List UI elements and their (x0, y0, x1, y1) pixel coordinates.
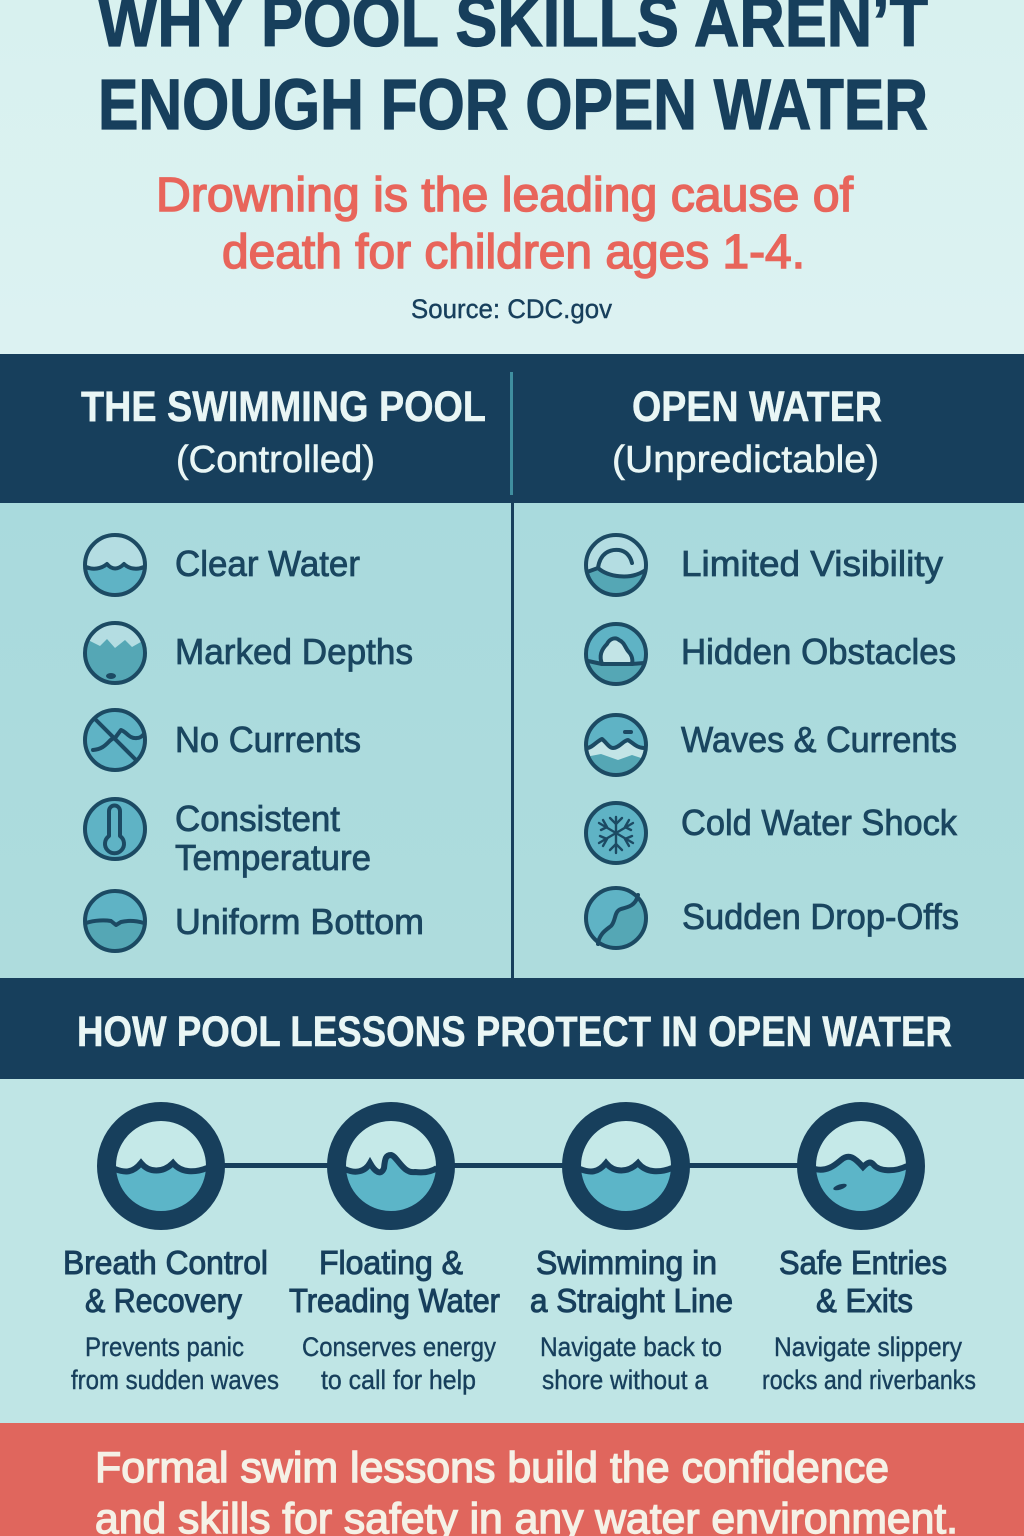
label: limited visibility: Limited Visibility (681, 543, 943, 584)
skill: breath control: Prevents panic (85, 1332, 244, 1362)
label: sudden drop-offs: Sudden Drop-Offs (682, 896, 959, 937)
skill: floating and treading water (289, 1244, 500, 1395)
label: consistent temperature (175, 798, 371, 878)
skill: swimming in a straight line: Swimming in (536, 1244, 717, 1281)
icon: uniform bottom (84, 890, 146, 952)
skill: swimming in a straight line: a Straight Line (530, 1282, 733, 1319)
icon: breath control (106, 1112, 216, 1220)
label: hidden obstacles: Hidden Obstacles (681, 631, 956, 672)
icon: straight line swimming (572, 1112, 680, 1220)
source line: Source: CDC.gov (411, 294, 612, 324)
section heading band (0, 978, 1024, 1079)
icon: no currents (85, 710, 145, 770)
subtitle statistic: death for children ages 1-4. (222, 226, 805, 279)
footer callout (0, 1423, 1024, 1536)
label: marked depths: Marked Depths (175, 631, 413, 672)
label: consistent temperature: Temperature (175, 837, 371, 878)
icon: snowflake (586, 803, 646, 863)
panel: open water (585, 534, 959, 952)
label: waves and currents: Waves & Currents (681, 719, 957, 760)
skill: safe entries and exits: rocks and riverbanks (762, 1365, 976, 1395)
icon: safe entries (806, 1112, 916, 1220)
header background (0, 0, 1024, 354)
footer callout: Formal swim lessons build the confidence (95, 1444, 889, 1492)
comparison header band: (Controlled) (176, 439, 375, 481)
label: cold water shock: Cold Water Shock (681, 802, 958, 843)
comparison header band: THE SWIMMING POOL (81, 383, 486, 431)
comparison header band: (Unpredictable) (612, 439, 879, 481)
icon: waves and currents (585, 714, 647, 776)
comparison panel background (0, 503, 1024, 978)
skills timeline (106, 1112, 916, 1220)
comparison header band (0, 354, 1024, 503)
skill: swimming in a straight line (530, 1244, 733, 1395)
skills section background (0, 1079, 1024, 1423)
icon: drop-off (585, 887, 652, 952)
icon: limited visibility (585, 534, 647, 596)
skill: breath control: & Recovery (85, 1282, 242, 1319)
skill: floating and treading water: Floating & (319, 1244, 463, 1281)
label: uniform bottom: Uniform Bottom (175, 901, 424, 942)
subtitle statistic (156, 169, 854, 279)
label: no currents: No Currents (175, 719, 361, 760)
skill: breath control: from sudden waves (71, 1365, 279, 1395)
icon: thermometer (85, 799, 145, 859)
icon: marked depths (84, 622, 146, 684)
icon: clear water (84, 534, 146, 596)
skill: floating and treading water: Treading Water (289, 1282, 500, 1319)
skill: safe entries and exits: Navigate slippery (774, 1332, 962, 1362)
skill: safe entries and exits (762, 1244, 976, 1395)
comparison header band: OPEN WATER (632, 383, 882, 431)
skill: floating and treading water: Conserves energy (302, 1332, 496, 1362)
skill: breath control: Breath Control (63, 1244, 268, 1281)
connector line (220, 1163, 820, 1168)
icon: floating and treading (336, 1112, 446, 1220)
skill: breath control (63, 1244, 279, 1395)
icon: hidden obstacles (585, 623, 647, 686)
skill: swimming in a straight line: shore without a (542, 1365, 709, 1395)
skill: swimming in a straight line: Navigate back to (540, 1332, 722, 1362)
skill: safe entries and exits: & Exits (816, 1282, 913, 1319)
skill: floating and treading water: to call for help (321, 1365, 476, 1395)
panel: swimming pool (84, 534, 424, 952)
label: consistent temperature: Consistent (175, 798, 340, 839)
title (98, 0, 928, 145)
label: clear water: Clear Water (175, 543, 360, 584)
subtitle statistic: Drowning is the leading cause of (156, 169, 854, 222)
skill: safe entries and exits: Safe Entries (779, 1244, 947, 1281)
